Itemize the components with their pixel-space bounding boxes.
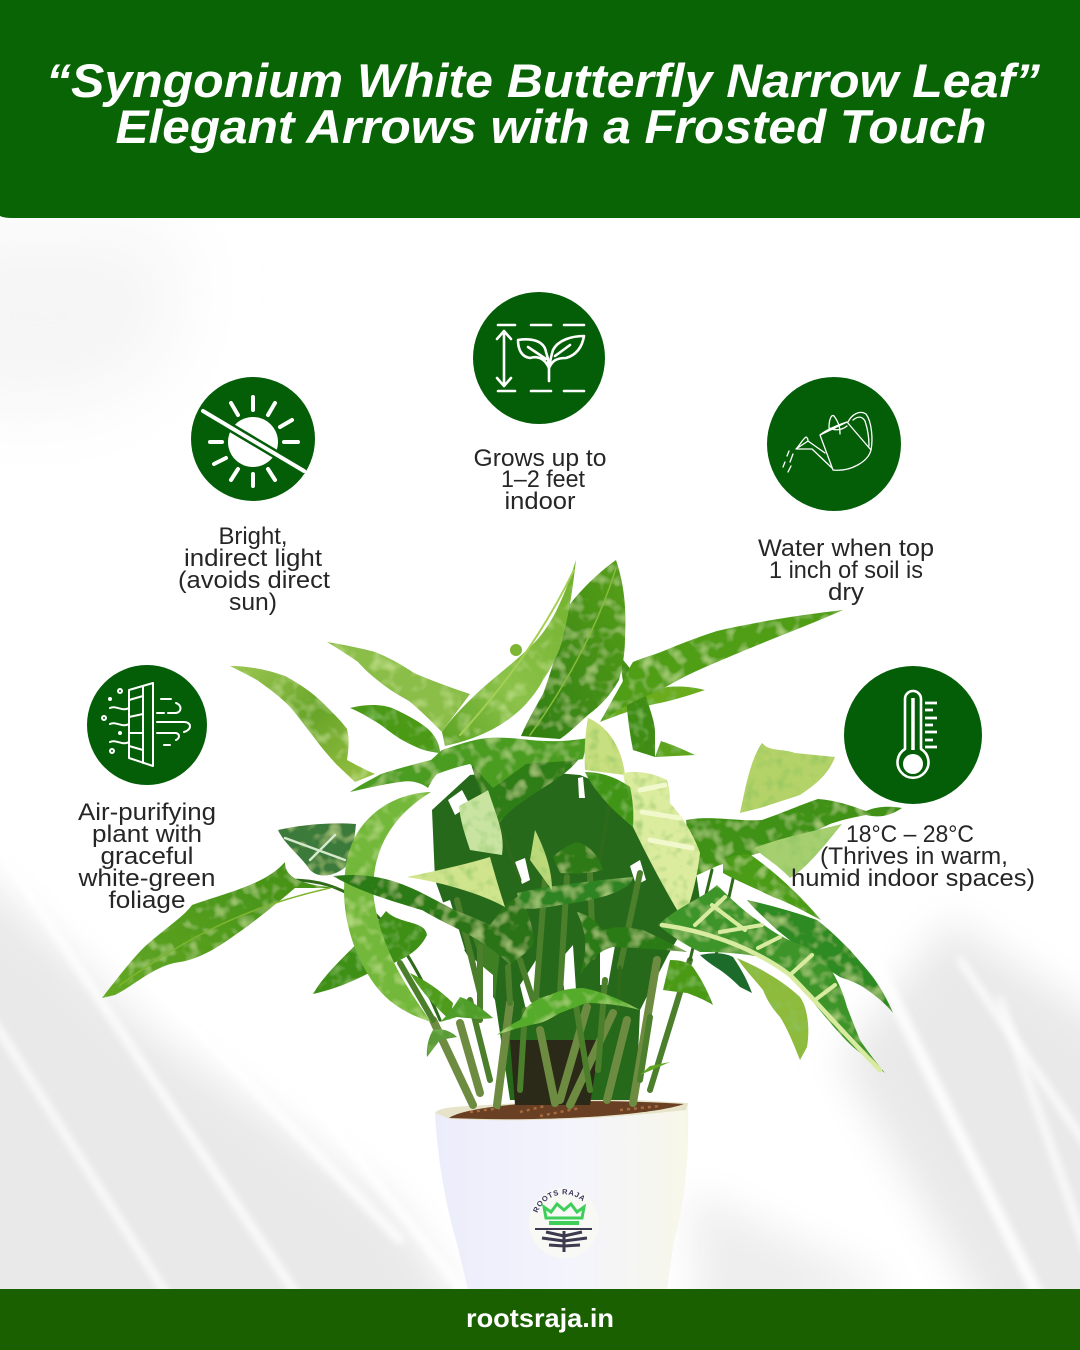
logo sticker: ROOTS RAJA	[533, 1189, 584, 1213]
icon: watering can	[767, 377, 901, 511]
leaf bud	[510, 644, 522, 656]
leaf: lower far left	[102, 862, 340, 998]
plant foliage: upper and outer leaves	[102, 560, 902, 1035]
leaf: right big variegated	[658, 885, 885, 1073]
title	[46, 54, 1041, 153]
text: air purifying: plant with	[92, 821, 202, 848]
text: air purifying	[77, 799, 216, 914]
text: temperature: (Thrives in warm,	[820, 843, 1008, 870]
icon: no direct sun	[191, 377, 315, 501]
text: light: indirect light	[184, 545, 322, 572]
footer website: rootsraja.in	[466, 1303, 614, 1333]
leaf: pale veins on variegated leaves	[120, 568, 880, 1070]
leaf: right lower pale	[737, 958, 808, 1060]
plant stems	[290, 800, 735, 1105]
plant foliage: pale front leaves	[407, 718, 842, 1060]
title: “Syngonium White Butterfly Narrow Leaf”	[46, 54, 1041, 107]
footer band	[0, 1289, 1080, 1350]
text: air purifying: graceful	[100, 843, 194, 870]
pot	[435, 1098, 688, 1289]
text: height: Grows up to	[474, 445, 606, 472]
leaf: pale upper left	[327, 642, 470, 732]
leaf: tall centre right	[521, 560, 625, 739]
title: Elegant Arrows with a Frosted Touch	[116, 100, 986, 153]
text: temperature	[791, 821, 1035, 892]
logo sticker	[532, 1189, 592, 1252]
plant foliage: back leaves	[313, 655, 713, 1075]
text: temperature: humid indoor spaces)	[791, 865, 1035, 892]
leaf: mid arched	[577, 912, 687, 975]
text: water	[758, 535, 934, 606]
icon: plant height	[473, 292, 605, 424]
text: water: Water when top	[758, 535, 934, 562]
leaf: long top right	[600, 610, 843, 722]
icon: thermometer	[844, 666, 982, 804]
text: water: dry	[828, 579, 864, 606]
leaf: upper left	[230, 666, 375, 782]
leaf: dark round centre	[553, 842, 603, 874]
text: light: (avoids direct	[178, 567, 330, 594]
leaf: low front bright	[497, 988, 640, 1035]
leaf: silver left	[278, 823, 356, 875]
leaf: right dark variegated	[747, 900, 893, 1013]
text: light: Bright,	[218, 523, 288, 550]
text: height: 1–2 feet	[501, 466, 585, 493]
leaf: right horizontal	[686, 799, 902, 876]
leaf: dark broad	[400, 890, 533, 965]
leaf: right drooping	[723, 854, 821, 920]
leaf: dark under variegated	[700, 953, 752, 993]
header band	[0, 0, 1080, 218]
leaf: horizontal centre strip	[517, 877, 633, 909]
text: air purifying: foliage	[108, 887, 186, 914]
text: air purifying: Air-purifying	[78, 799, 216, 826]
plant centre shade	[432, 770, 700, 1105]
leaf: long curved pale	[344, 792, 431, 1022]
icon: air purifying	[87, 665, 207, 785]
leaf: dark central arch	[470, 745, 585, 830]
text: water: 1 inch of soil is	[769, 557, 923, 584]
leaf: tall centre left	[442, 560, 576, 746]
text: air purifying: white-green	[77, 865, 216, 892]
leaf: arched frilled	[350, 738, 588, 792]
text: light	[178, 523, 330, 616]
text: temperature: 18°C – 28°C	[846, 821, 974, 848]
text: height	[474, 445, 606, 515]
text: light: sun)	[229, 589, 277, 616]
text: height: indoor	[504, 488, 576, 515]
